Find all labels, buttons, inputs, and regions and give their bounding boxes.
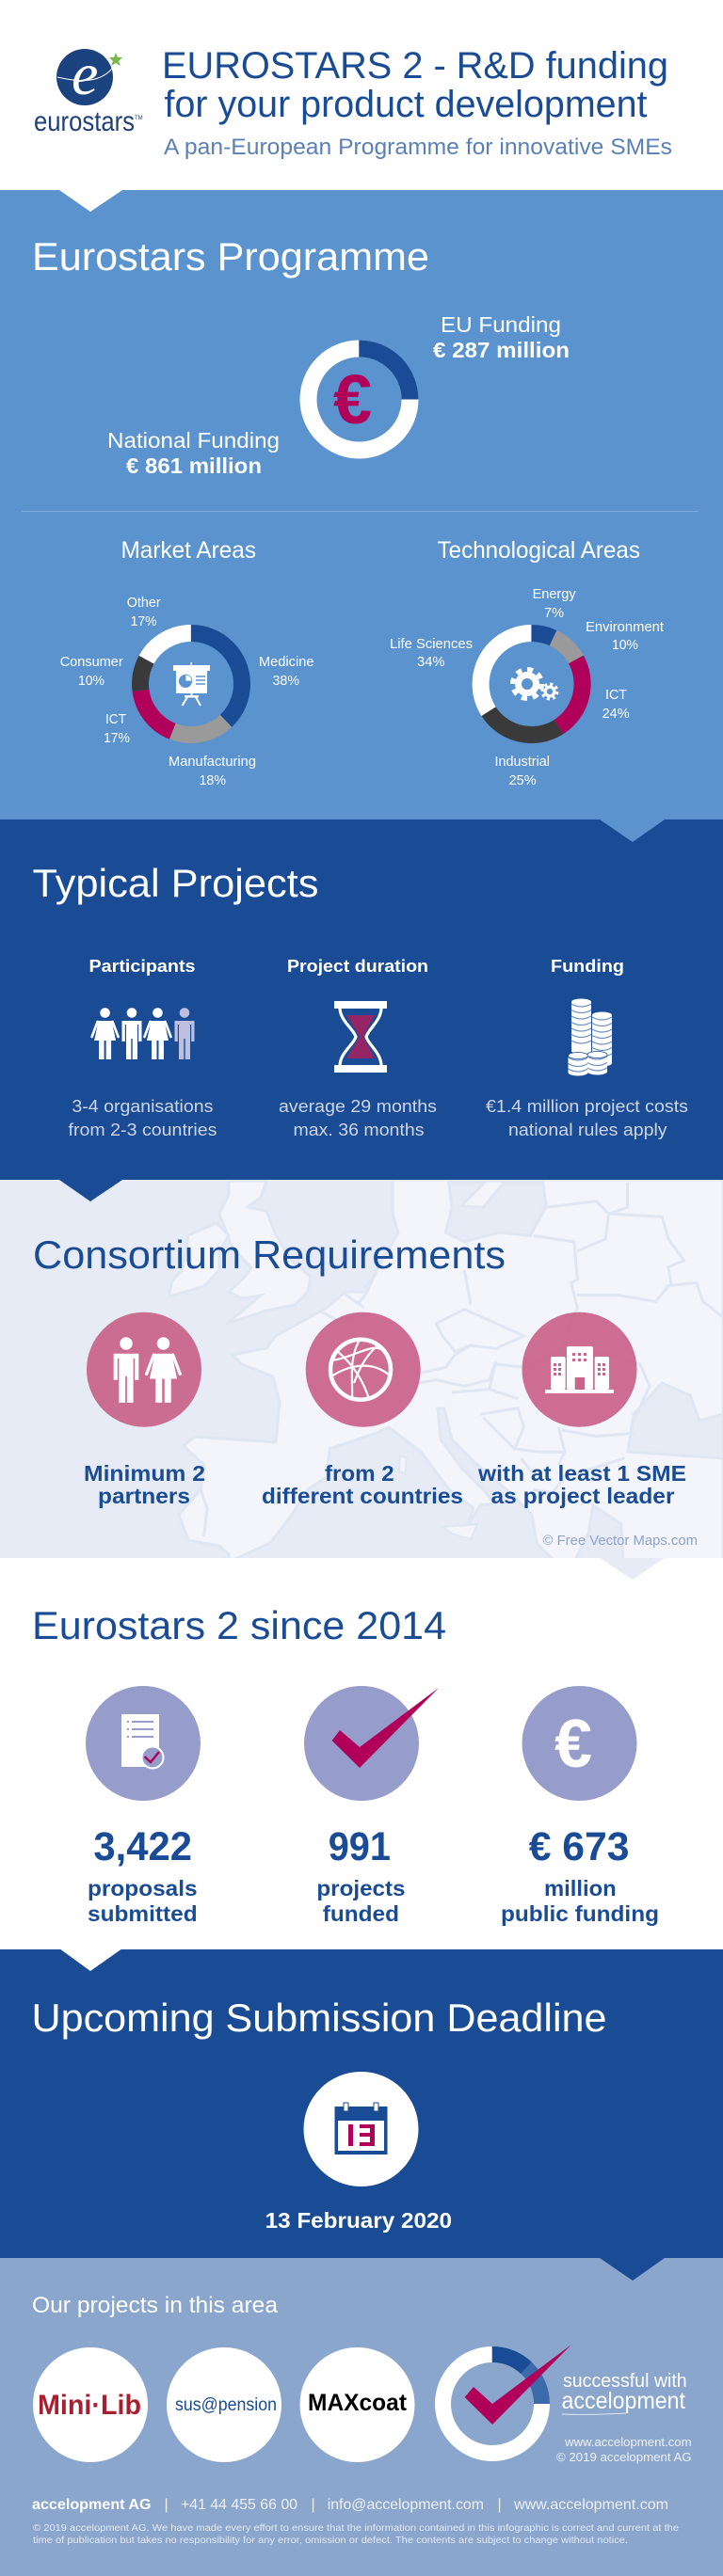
item: SME project leader bbox=[477, 1312, 686, 1508]
icon: man and woman bbox=[114, 1337, 180, 1403]
map credit: © Free Vector Maps.com bbox=[542, 1533, 698, 1549]
heading: Typical Projects: Typical Projects bbox=[32, 861, 318, 905]
label: EU Funding: EU Funding bbox=[441, 312, 561, 337]
labels: market areas: Consumer bbox=[60, 654, 123, 670]
contact row: | bbox=[311, 2497, 315, 2513]
stat: projects funded: funded bbox=[323, 1901, 399, 1926]
labels: market areas: 18% bbox=[200, 772, 226, 788]
disclaimer bbox=[33, 2522, 679, 2546]
title: EUROSTARS 2 - R&D funding bbox=[162, 45, 668, 87]
icon: document with check bbox=[121, 1714, 164, 1769]
icon: people bbox=[92, 1008, 194, 1059]
icon: hourglass bbox=[334, 1001, 387, 1073]
icon: euro sign: € bbox=[554, 1707, 592, 1782]
labels: market areas: Other bbox=[127, 595, 161, 611]
stat: projects funded: projects bbox=[316, 1876, 405, 1900]
labels: market areas: 10% bbox=[78, 673, 104, 689]
heading: Upcoming Submission Deadline: Upcoming Submission Deadline bbox=[32, 1996, 606, 2040]
panel: header bbox=[0, 0, 723, 190]
column: funding: Funding bbox=[551, 956, 624, 976]
text: successful with accelopment: accelopment bbox=[561, 2388, 685, 2414]
date: 13 February 2020 bbox=[265, 2208, 452, 2233]
heading: Consortium Requirements: Consortium Requirements bbox=[33, 1232, 506, 1277]
stat: public funding bbox=[501, 1686, 659, 1926]
labels: technological areas: Environment bbox=[586, 619, 665, 635]
item: minimum 2 partners: partners bbox=[98, 1484, 190, 1508]
disclaimer: © 2019 accelopment AG. We have made every effort to ensure that the information contained in this infographic is correct and current at the bbox=[33, 2522, 679, 2534]
logo: eurostars bbox=[34, 40, 143, 137]
item: minimum 2 partners: Minimum 2 bbox=[84, 1461, 205, 1486]
column: participants: from 2-3 countries bbox=[68, 1120, 217, 1139]
item: minimum 2 partners bbox=[84, 1312, 205, 1508]
contact row: | bbox=[497, 2497, 502, 2513]
item: different countries: from 2 bbox=[325, 1461, 394, 1486]
contact row: +41 44 455 66 00 bbox=[181, 2497, 297, 2513]
stat: proposals submitted: proposals bbox=[88, 1876, 198, 1900]
logo: Mini-Lib bbox=[33, 2347, 148, 2462]
chart: technological areas donut bbox=[481, 633, 583, 735]
labels: technological areas: 34% bbox=[417, 654, 444, 670]
column: project duration: average 29 months bbox=[279, 1096, 437, 1116]
contact row: accelopment AG bbox=[32, 2497, 152, 2513]
title bbox=[162, 45, 668, 125]
heading: Eurostars Programme: Eurostars Programme bbox=[32, 234, 429, 278]
column: participants: Participants bbox=[88, 956, 196, 976]
column: funding bbox=[486, 956, 688, 1139]
subtitle: A pan-European Programme for innovative SMEs bbox=[164, 135, 672, 160]
label: EU Funding: € 287 million bbox=[433, 338, 570, 362]
label: National Funding bbox=[107, 428, 280, 478]
chart: funding donut bbox=[309, 348, 410, 450]
icon: globe bbox=[330, 1340, 391, 1400]
icon: presentation board bbox=[173, 662, 210, 706]
icon: check mark bbox=[332, 1688, 439, 1768]
labels: technological areas: ICT bbox=[605, 687, 627, 703]
heading: Technological Areas: Technological Areas bbox=[437, 537, 640, 564]
labels: market areas: 17% bbox=[131, 613, 157, 629]
item: SME project leader: as project leader bbox=[491, 1484, 675, 1508]
panel: Consortium Requirements bbox=[0, 1180, 723, 1562]
labels: technological areas: 24% bbox=[602, 706, 630, 722]
contact row: www.accelopment.com bbox=[513, 2497, 668, 2513]
stat: projects funded bbox=[304, 1686, 439, 1926]
column: participants bbox=[68, 956, 217, 1139]
panel: footer bbox=[0, 2258, 723, 2576]
labels: technological areas: 25% bbox=[509, 772, 537, 788]
column: project duration: max. 36 months bbox=[294, 1120, 424, 1139]
logo: sus@pension bbox=[167, 2347, 281, 2462]
icon: calendar bbox=[303, 2072, 418, 2186]
label: National Funding: National Funding bbox=[107, 428, 280, 453]
labels: technological areas: 10% bbox=[612, 637, 638, 653]
labels: technological areas: Life Sciences bbox=[390, 636, 473, 652]
column: project duration bbox=[279, 956, 437, 1139]
stat: projects funded: 991 bbox=[329, 1824, 391, 1869]
panel: Typical Projects bbox=[0, 819, 723, 1180]
title: for your product development bbox=[164, 84, 648, 125]
icon: coin stacks bbox=[569, 999, 612, 1076]
column: funding: €1.4 million project costs bbox=[486, 1096, 688, 1116]
text: successful with accelopment bbox=[561, 2371, 687, 2414]
stat: proposals submitted bbox=[86, 1686, 201, 1926]
logo: MAXcoat bbox=[299, 2347, 414, 2462]
logo: eurostars: eurostars bbox=[34, 106, 135, 137]
labels: technological areas: Industrial bbox=[495, 754, 550, 770]
panel: Eurostars 2 since 2014 bbox=[0, 1558, 723, 1949]
heading: Market Areas: Market Areas bbox=[120, 537, 256, 564]
stat: proposals submitted: submitted bbox=[88, 1901, 198, 1926]
item: different countries: different countries bbox=[262, 1484, 463, 1508]
chart: funding donut: € bbox=[333, 360, 372, 438]
item: SME project leader: with at least 1 SME bbox=[477, 1461, 686, 1486]
labels: market areas: ICT bbox=[105, 711, 126, 727]
text: website and copyright: © 2019 accelopment AG bbox=[556, 2450, 692, 2464]
stat: proposals submitted: 3,422 bbox=[93, 1824, 192, 1869]
contact row: info@accelopment.com bbox=[328, 2497, 484, 2513]
labels: market areas bbox=[60, 595, 313, 788]
stat: public funding: € 673 bbox=[529, 1824, 629, 1869]
logo: eurostars: e bbox=[72, 40, 98, 107]
labels: technological areas: Energy bbox=[533, 586, 576, 602]
stat: public funding: million bbox=[544, 1876, 617, 1900]
contact row: | bbox=[164, 2497, 169, 2513]
heading: Our projects in this area: Our projects in this area bbox=[32, 2293, 279, 2318]
panel: Upcoming Submission Deadline bbox=[0, 1948, 723, 2258]
logo: accelopment donut with check bbox=[442, 2345, 571, 2454]
labels: market areas: 17% bbox=[104, 730, 130, 746]
column: participants: 3-4 organisations bbox=[72, 1096, 213, 1116]
contact row bbox=[32, 2497, 668, 2513]
text: successful with accelopment: successful with bbox=[563, 2371, 687, 2392]
panel: Eurostars Programme bbox=[0, 190, 723, 819]
label: EU Funding bbox=[433, 312, 570, 362]
column: funding: national rules apply bbox=[508, 1120, 667, 1139]
item: different countries bbox=[262, 1312, 463, 1508]
text: website and copyright: www.accelopment.com bbox=[564, 2435, 692, 2449]
logo: MAXcoat: MAXcoat bbox=[308, 2390, 408, 2416]
heading: Eurostars 2 since 2014: Eurostars 2 since 2014 bbox=[32, 1603, 446, 1647]
text: website and copyright bbox=[556, 2435, 692, 2464]
logo: eurostars: TM bbox=[135, 116, 143, 121]
labels: technological areas: 7% bbox=[544, 605, 564, 621]
map of Europe background bbox=[169, 1180, 723, 1562]
logo: Mini-Lib: Mini·Lib bbox=[38, 2390, 141, 2421]
labels: market areas: Medicine bbox=[259, 654, 314, 670]
label: National Funding: € 861 million bbox=[126, 453, 262, 478]
icon: office buildings bbox=[545, 1346, 614, 1393]
icon: gears bbox=[512, 670, 557, 699]
disclaimer: time of publication but takes no responsibility for any error, omission or defect. The contents are subject to change without notice. bbox=[33, 2535, 628, 2546]
chart: market areas donut bbox=[140, 633, 242, 735]
column: project duration: Project duration bbox=[287, 956, 428, 976]
logo: sus@pension: sus@pension bbox=[175, 2395, 277, 2415]
labels: market areas: Manufacturing bbox=[169, 754, 256, 770]
labels: technological areas bbox=[390, 586, 665, 788]
labels: market areas: 38% bbox=[273, 673, 299, 689]
stat: public funding: public funding bbox=[501, 1901, 659, 1926]
